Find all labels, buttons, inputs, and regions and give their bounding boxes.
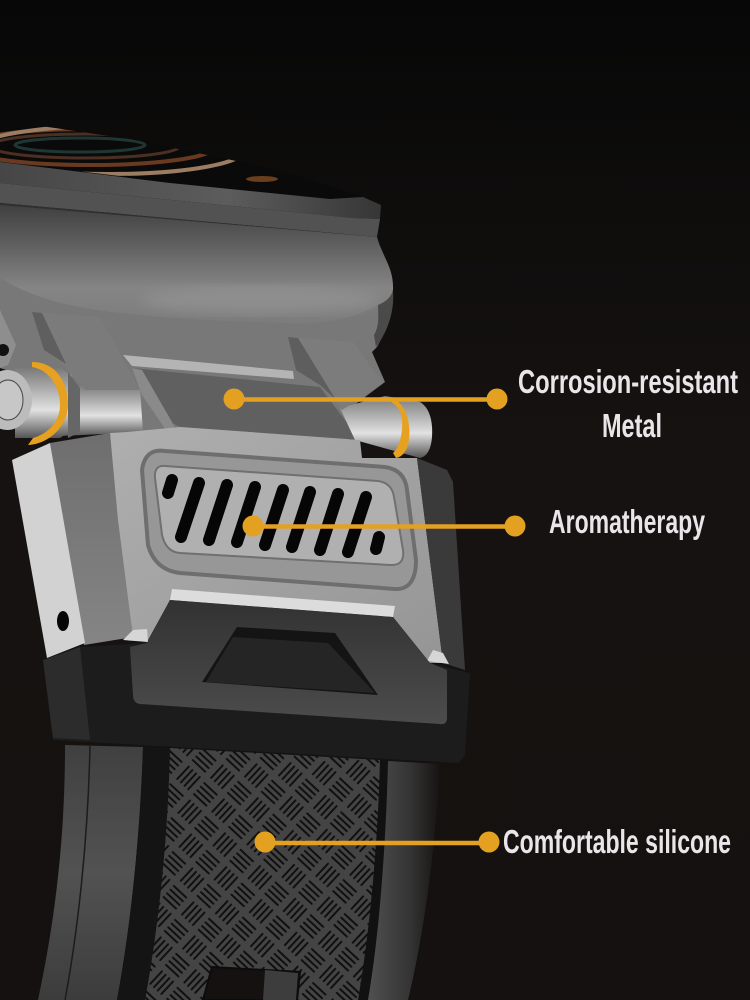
left corner highlight [123, 629, 148, 642]
recessed panel inner [155, 466, 403, 565]
leader line [254, 832, 500, 852]
cap trapezoid recess [202, 627, 378, 695]
right dark side face [417, 458, 465, 670]
callout: comfortable silicone [254, 823, 731, 860]
knuckle hole [0, 344, 9, 356]
watch screen [0, 126, 278, 182]
left pin behind lug [62, 385, 143, 436]
cap side facet [43, 647, 90, 740]
strap [38, 745, 440, 1000]
callout: corrosion-resistant metal [224, 363, 738, 444]
vent slots [168, 480, 379, 552]
right metal pin [340, 396, 432, 458]
watch case lower plate [0, 270, 386, 445]
bulge highlight [140, 286, 380, 314]
strap left dark stripe [117, 747, 170, 1000]
case side crescent [374, 290, 393, 347]
watch case band [0, 183, 380, 237]
chamfer highlight [170, 589, 395, 617]
label text: Metal [602, 407, 662, 444]
right lug [288, 337, 383, 410]
center plate [132, 368, 360, 440]
right corner highlight [427, 650, 449, 664]
strap slot opening [203, 967, 300, 1000]
metal block front face [110, 427, 443, 663]
strap right band [368, 761, 440, 1000]
strap right dark stripe [358, 760, 388, 1000]
white block end face [12, 443, 85, 658]
upper rail highlight [123, 355, 294, 379]
woven silicone texture [145, 748, 380, 1000]
callout: aromatherapy [242, 503, 705, 540]
watch bezel [0, 162, 381, 219]
left metal pin [0, 362, 80, 445]
strap left highlight line [65, 746, 90, 1000]
leader line [242, 516, 526, 536]
left lug [32, 312, 140, 390]
product photo: watch and band [0, 120, 470, 1000]
center plate chamfer [132, 368, 180, 440]
recessed panel outer [142, 451, 416, 589]
right lug inner edge [288, 337, 336, 400]
small screw hole [57, 611, 69, 631]
left lug inner edge [32, 312, 66, 364]
black lower cap [43, 600, 470, 763]
grey block side face [50, 433, 133, 645]
watch case bulge [0, 205, 393, 323]
strap left band [38, 745, 143, 1000]
cap front panel [130, 600, 447, 724]
label text [518, 363, 738, 444]
leader line [224, 388, 508, 410]
upper-left lug knuckle [0, 310, 16, 368]
